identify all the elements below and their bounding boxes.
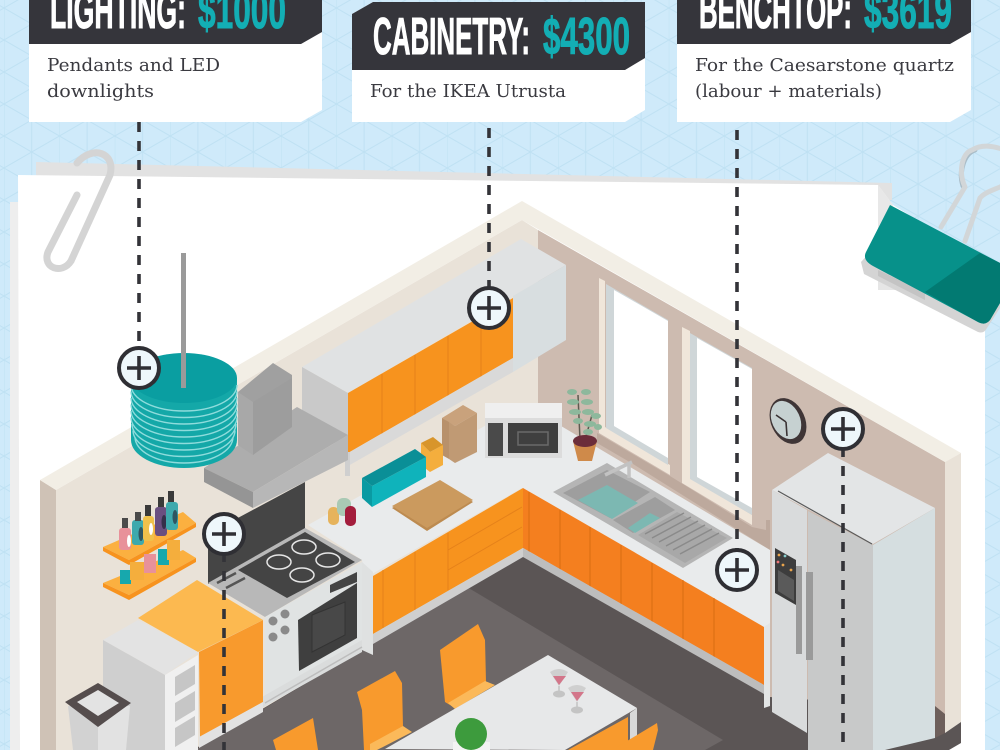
window: left (599, 278, 670, 475)
shelf unit (103, 620, 198, 750)
oven display (330, 572, 357, 593)
leader line: cabinetry (487, 128, 491, 290)
fridge left door (772, 490, 807, 733)
card: cabinetry (352, 2, 645, 122)
teal tray (362, 449, 426, 507)
sink (553, 462, 733, 568)
base cabinets: left (362, 488, 523, 655)
icon: paper clip (47, 153, 111, 269)
kickplate at wall end (935, 706, 945, 738)
marker: benchtop (717, 550, 757, 590)
upper cabinet (302, 239, 566, 476)
cabinet left side (302, 367, 348, 452)
bench: orange return (138, 580, 263, 748)
clock (762, 392, 814, 450)
water dispenser (775, 548, 796, 605)
panel: back sheet of paper (10, 162, 892, 750)
card: benchtop (677, 0, 971, 122)
fridge handles (796, 566, 813, 660)
knobs (268, 610, 290, 642)
leader line: benchtop (735, 130, 739, 552)
stove (208, 482, 362, 708)
marker: lighting (119, 348, 159, 388)
wall: left wall end strip (40, 480, 56, 750)
card: cabinetry: CABINETRY: (373, 8, 530, 66)
oven door (298, 583, 357, 671)
cabinet orange doors (348, 298, 513, 453)
window: right (682, 327, 752, 525)
counter top (308, 404, 770, 628)
fridge (772, 453, 935, 750)
floor (193, 555, 961, 750)
splashback (208, 482, 305, 584)
chair: front (273, 718, 318, 750)
leader line: fridge (841, 447, 845, 750)
table leg (630, 708, 637, 747)
icon: binder clip (861, 146, 1000, 332)
wall: left cap (40, 201, 522, 490)
cabinet right block (513, 265, 566, 372)
card: benchtop: (labour + materials) (695, 81, 882, 102)
card: cabinetry: $4300 (543, 8, 630, 66)
marker: fridge (823, 409, 863, 449)
table plant (453, 718, 490, 750)
chair: rear right (440, 624, 495, 709)
canisters (328, 498, 356, 526)
fridge top (772, 453, 935, 544)
panel: paper sheet (18, 175, 985, 750)
hob (238, 532, 355, 598)
card: lighting: downlights (47, 81, 154, 102)
wall: right wall end strip (945, 453, 961, 733)
wall: left wall (56, 220, 538, 750)
fridge right door (808, 511, 873, 750)
base cabinets: right (523, 488, 770, 708)
marker: cabinetry (469, 288, 509, 328)
microwave (485, 403, 562, 458)
card: cabinetry: For the IKEA Utrusta (370, 81, 566, 102)
dining table (385, 655, 658, 750)
yellow container (421, 437, 443, 472)
kitchen illustration (40, 201, 961, 750)
plant (567, 389, 602, 461)
cabinet top (302, 239, 566, 393)
bottles (119, 491, 178, 550)
bin (65, 683, 131, 750)
marker: oven (204, 514, 244, 554)
wall: right cap (522, 201, 961, 462)
card: lighting (29, 0, 322, 122)
card: benchtop: For the Caesarstone quartz (695, 55, 954, 76)
splashback band (597, 433, 770, 550)
jars (120, 540, 180, 584)
oven body (265, 562, 362, 697)
pendant light (131, 253, 237, 468)
fridge side (873, 508, 935, 750)
chair under table (568, 717, 628, 750)
card: lighting: Pendants and LED (47, 55, 220, 76)
chair at table end (617, 723, 658, 750)
range hood (204, 363, 348, 508)
leader line: lighting (137, 122, 141, 350)
chair: middle (357, 671, 412, 750)
wine glasses (550, 669, 586, 714)
wall shelves (103, 491, 196, 600)
stove top (208, 528, 362, 617)
cabinet bottom strip (348, 358, 513, 466)
wall: right wall (538, 230, 945, 750)
leader line: oven (222, 552, 226, 750)
cardboard boxes (442, 405, 477, 463)
cutting board (392, 480, 473, 531)
floor rug (195, 587, 723, 750)
